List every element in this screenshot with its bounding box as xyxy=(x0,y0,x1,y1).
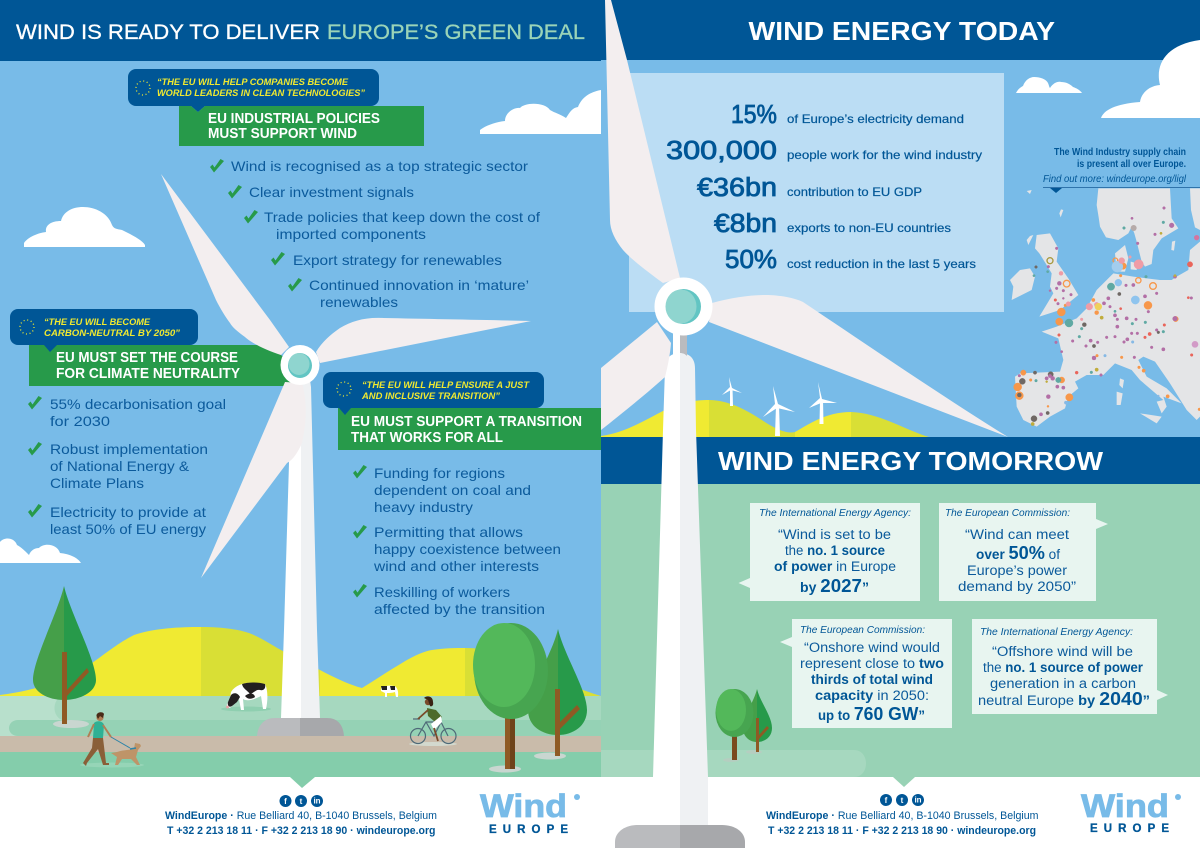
header bar: wind energy today: WIND ENERGY TODAY xyxy=(748,16,1055,46)
tree right round xyxy=(473,623,548,772)
bullet list: industrial policies: Export strategy for renewables xyxy=(293,252,502,268)
bullet list: climate neutrality xyxy=(28,396,226,537)
person walking with dog xyxy=(80,712,144,768)
cloud xyxy=(480,90,601,134)
key figures panel: €36bn xyxy=(697,174,777,202)
callout: world leaders: “THE EU WILL HELP COMPANIES BECOME xyxy=(157,77,349,88)
quote card: European Commission 760 GW: thirds of total wind xyxy=(811,672,933,687)
social icons: f xyxy=(885,796,888,805)
key figures panel: people work for the wind industry xyxy=(787,148,982,162)
bullet list: industrial policies xyxy=(210,158,540,310)
footer contact details: T +32 2 213 18 11 · F +32 2 213 18 90 · windeurope.org xyxy=(768,825,1036,837)
green box: industrial policies xyxy=(179,106,424,146)
bullet list: just transition: Permitting that allows xyxy=(374,524,523,540)
key figures panel: 50% xyxy=(725,246,777,274)
panel: Wind energy tomorrow xyxy=(601,437,1200,837)
cloud xyxy=(1016,77,1082,93)
key figures panel: exports to non-EU countries xyxy=(787,221,951,235)
ground strip xyxy=(601,750,866,777)
header bar with title: EUROPE’S GREEN DEAL xyxy=(327,20,585,44)
green box: climate neutrality: FOR CLIMATE NEUTRALITY xyxy=(56,366,240,382)
green box: industrial policies: MUST SUPPORT WIND xyxy=(208,126,357,142)
callout: just transition xyxy=(323,372,544,415)
tree left xyxy=(33,586,96,728)
header bar: wind energy today xyxy=(601,0,1200,60)
key figures panel xyxy=(629,73,1004,312)
cloud xyxy=(1101,40,1200,118)
tower base xyxy=(615,825,680,848)
quote card: IEA 2027: The International Energy Agency: xyxy=(759,508,911,519)
bullet list: climate neutrality: Climate Plans xyxy=(50,475,144,491)
WindEurope logo: Wind xyxy=(480,788,567,824)
quote card: IEA 2040: generation in a carbon xyxy=(990,676,1136,691)
quote card: IEA 2027: the no. 1 source xyxy=(785,543,885,558)
map caption: is present all over Europe. xyxy=(1077,159,1186,170)
bullet list: industrial policies: Clear investment signals xyxy=(249,184,414,200)
quote card: IEA 2027 xyxy=(738,503,920,601)
callout: just transition: AND INCLUSIVE TRANSITION” xyxy=(361,391,500,402)
callout: carbon-neutral xyxy=(10,309,198,352)
cow small xyxy=(381,686,398,697)
header bar: wind energy tomorrow xyxy=(601,437,1200,484)
bullet list: industrial policies: Continued innovation in ‘mature’ xyxy=(309,277,529,293)
blade right xyxy=(709,295,1008,437)
callout: carbon-neutral: CARBON-NEUTRAL BY 2050” xyxy=(44,328,180,339)
social icons xyxy=(280,795,323,807)
bullet list: just transition: Funding for regions xyxy=(374,465,505,481)
bullet list: climate neutrality: Robust implementation xyxy=(50,441,208,457)
green box: industrial policies: EU INDUSTRIAL POLICIES xyxy=(208,111,380,127)
quote card: IEA 2027: by 2027” xyxy=(800,576,869,596)
key figures panel: 15% xyxy=(731,101,777,129)
footer contact details xyxy=(766,810,1038,837)
blade left xyxy=(601,322,671,430)
panel: Wind energy today xyxy=(601,0,1200,437)
bullet list: just transition xyxy=(353,465,561,617)
social icons: in xyxy=(313,796,321,806)
bullet list: industrial policies: Trade policies that keep down the cost of xyxy=(264,209,540,225)
small trees xyxy=(716,689,772,762)
small hills xyxy=(601,400,929,437)
header bar with title xyxy=(0,0,607,61)
bullet list: climate neutrality: 55% decarbonisation goal xyxy=(50,396,226,412)
map caption xyxy=(1043,147,1200,193)
quote card: European Commission 760 GW xyxy=(780,619,952,728)
quote card: European Commission 50%: The European Commission: xyxy=(945,508,1070,519)
quote card: IEA 2040: The International Energy Agency: xyxy=(980,627,1133,638)
bullet list: climate neutrality: of National Energy & xyxy=(50,458,190,474)
bullet list: just transition: affected by the transition xyxy=(374,601,545,617)
header bar: wind energy tomorrow: WIND ENERGY TOMORROW xyxy=(718,446,1103,476)
social icons: t xyxy=(901,796,904,805)
footer contact details: WindEurope · Rue Belliard 40, B-1040 Brussels, Belgium xyxy=(165,810,437,822)
quote card: IEA 2027: “Wind is set to be xyxy=(778,527,891,542)
bullet list: just transition: heavy industry xyxy=(374,499,473,515)
WindEurope logo: Wind xyxy=(1081,788,1169,824)
bullet list: industrial policies: Wind is recognised as a top strategic sector xyxy=(231,158,528,174)
bullet list: just transition: happy coexistence between xyxy=(374,541,561,557)
social icons: f xyxy=(284,797,287,806)
callout: world leaders: WORLD LEADERS IN CLEAN TECHNOLOGIES” xyxy=(157,88,365,99)
green box: climate neutrality xyxy=(29,345,292,386)
footer contact details xyxy=(165,810,437,837)
bullet list: industrial policies: renewables xyxy=(320,294,398,310)
cloud xyxy=(0,539,81,563)
cow large xyxy=(221,682,271,712)
tree right triangular xyxy=(528,629,587,760)
footer pointer xyxy=(290,777,315,788)
bullet list: climate neutrality: least 50% of EU energy xyxy=(50,521,206,537)
key figures panel: contribution to EU GDP xyxy=(787,185,922,199)
quote card: European Commission 50%: demand by 2050” xyxy=(958,579,1076,594)
quote card: IEA 2040 xyxy=(972,619,1168,714)
quote card: European Commission 760 GW: represent close to two xyxy=(800,656,944,671)
blade up xyxy=(605,0,680,283)
WindEurope logo xyxy=(1081,788,1181,835)
footer contact details: T +32 2 213 18 11 · F +32 2 213 18 90 · windeurope.org xyxy=(167,825,436,837)
social icons xyxy=(880,794,924,806)
quote card: European Commission 50%: Europe’s power xyxy=(967,563,1068,578)
green box: just transition: EU MUST SUPPORT A TRANSITION xyxy=(351,414,582,430)
bullet list: industrial policies: imported components xyxy=(276,226,426,242)
green box: climate neutrality: EU MUST SET THE COURSE xyxy=(56,350,238,366)
map caption: Find out more: windeurope.org/ligl xyxy=(1043,174,1187,185)
quote card: European Commission 760 GW: The European Commission: xyxy=(800,625,925,636)
WindEurope logo: EUROPE xyxy=(1090,823,1169,835)
turbine blades and hub xyxy=(161,174,531,578)
quote card: IEA 2040: the no. 1 source of power xyxy=(983,660,1144,675)
quote card: European Commission 760 GW: capacity in 2050: xyxy=(815,688,929,703)
panel: Europe's Green Deal xyxy=(0,0,607,837)
tower neck shadow xyxy=(680,330,687,356)
bullet list: just transition: dependent on coal and xyxy=(374,482,531,498)
callout: carbon-neutral: “THE EU WILL BECOME xyxy=(44,317,151,328)
quote card: European Commission 50%: over 50% of xyxy=(976,543,1060,563)
callout: just transition: “THE EU WILL HELP ENSURE A JUST xyxy=(362,380,530,391)
key figures panel: €8bn xyxy=(714,210,777,238)
key figures panel: of Europe’s electricity demand xyxy=(787,112,964,126)
footer contact details: WindEurope · Rue Belliard 40, B-1040 Brussels, Belgium xyxy=(766,810,1038,822)
key figures panel: cost reduction in the last 5 years xyxy=(787,257,976,271)
WindEurope logo: EUROPE xyxy=(489,824,568,836)
tower neck xyxy=(673,330,680,358)
cloud xyxy=(24,207,145,247)
quote card: European Commission 760 GW: up to 760 GW” xyxy=(818,704,925,724)
bullet list: climate neutrality: for 2030 xyxy=(50,413,110,429)
hub xyxy=(654,278,712,336)
cyclist xyxy=(409,696,457,746)
green box: just transition xyxy=(338,408,601,450)
quote card: European Commission 760 GW: “Onshore wind would xyxy=(804,640,940,655)
WindEurope logo xyxy=(480,788,580,836)
small turbines xyxy=(722,377,837,436)
large turbine spanning right panel xyxy=(601,0,1008,848)
quote card: IEA 2040: “Offshore wind will be xyxy=(992,644,1133,659)
quote card: European Commission 50% xyxy=(939,503,1108,601)
tower xyxy=(653,353,680,825)
landscape ground and hills xyxy=(0,627,601,777)
turbine tower and base xyxy=(257,380,344,736)
bullet list: just transition: wind and other interests xyxy=(373,558,539,574)
map of Europe with supply chain dots xyxy=(1010,188,1200,427)
header bar with title: WIND IS READY TO DELIVER xyxy=(16,20,320,44)
quote card: IEA 2027: of power in Europe xyxy=(774,559,896,574)
callout: world leaders xyxy=(128,69,379,112)
green box: just transition: THAT WORKS FOR ALL xyxy=(351,430,503,446)
footer pointer xyxy=(893,777,915,787)
key figures panel: 300,000 xyxy=(666,137,777,165)
bullet list: just transition: Reskilling of workers xyxy=(374,584,510,600)
quote card: European Commission 50%: “Wind can meet xyxy=(965,527,1069,542)
bullet list: climate neutrality: Electricity to provide at xyxy=(50,504,206,520)
quote card: IEA 2040: neutral Europe by 2040 ” xyxy=(978,689,1150,709)
social icons: t xyxy=(300,797,303,806)
social icons: in xyxy=(914,796,922,804)
